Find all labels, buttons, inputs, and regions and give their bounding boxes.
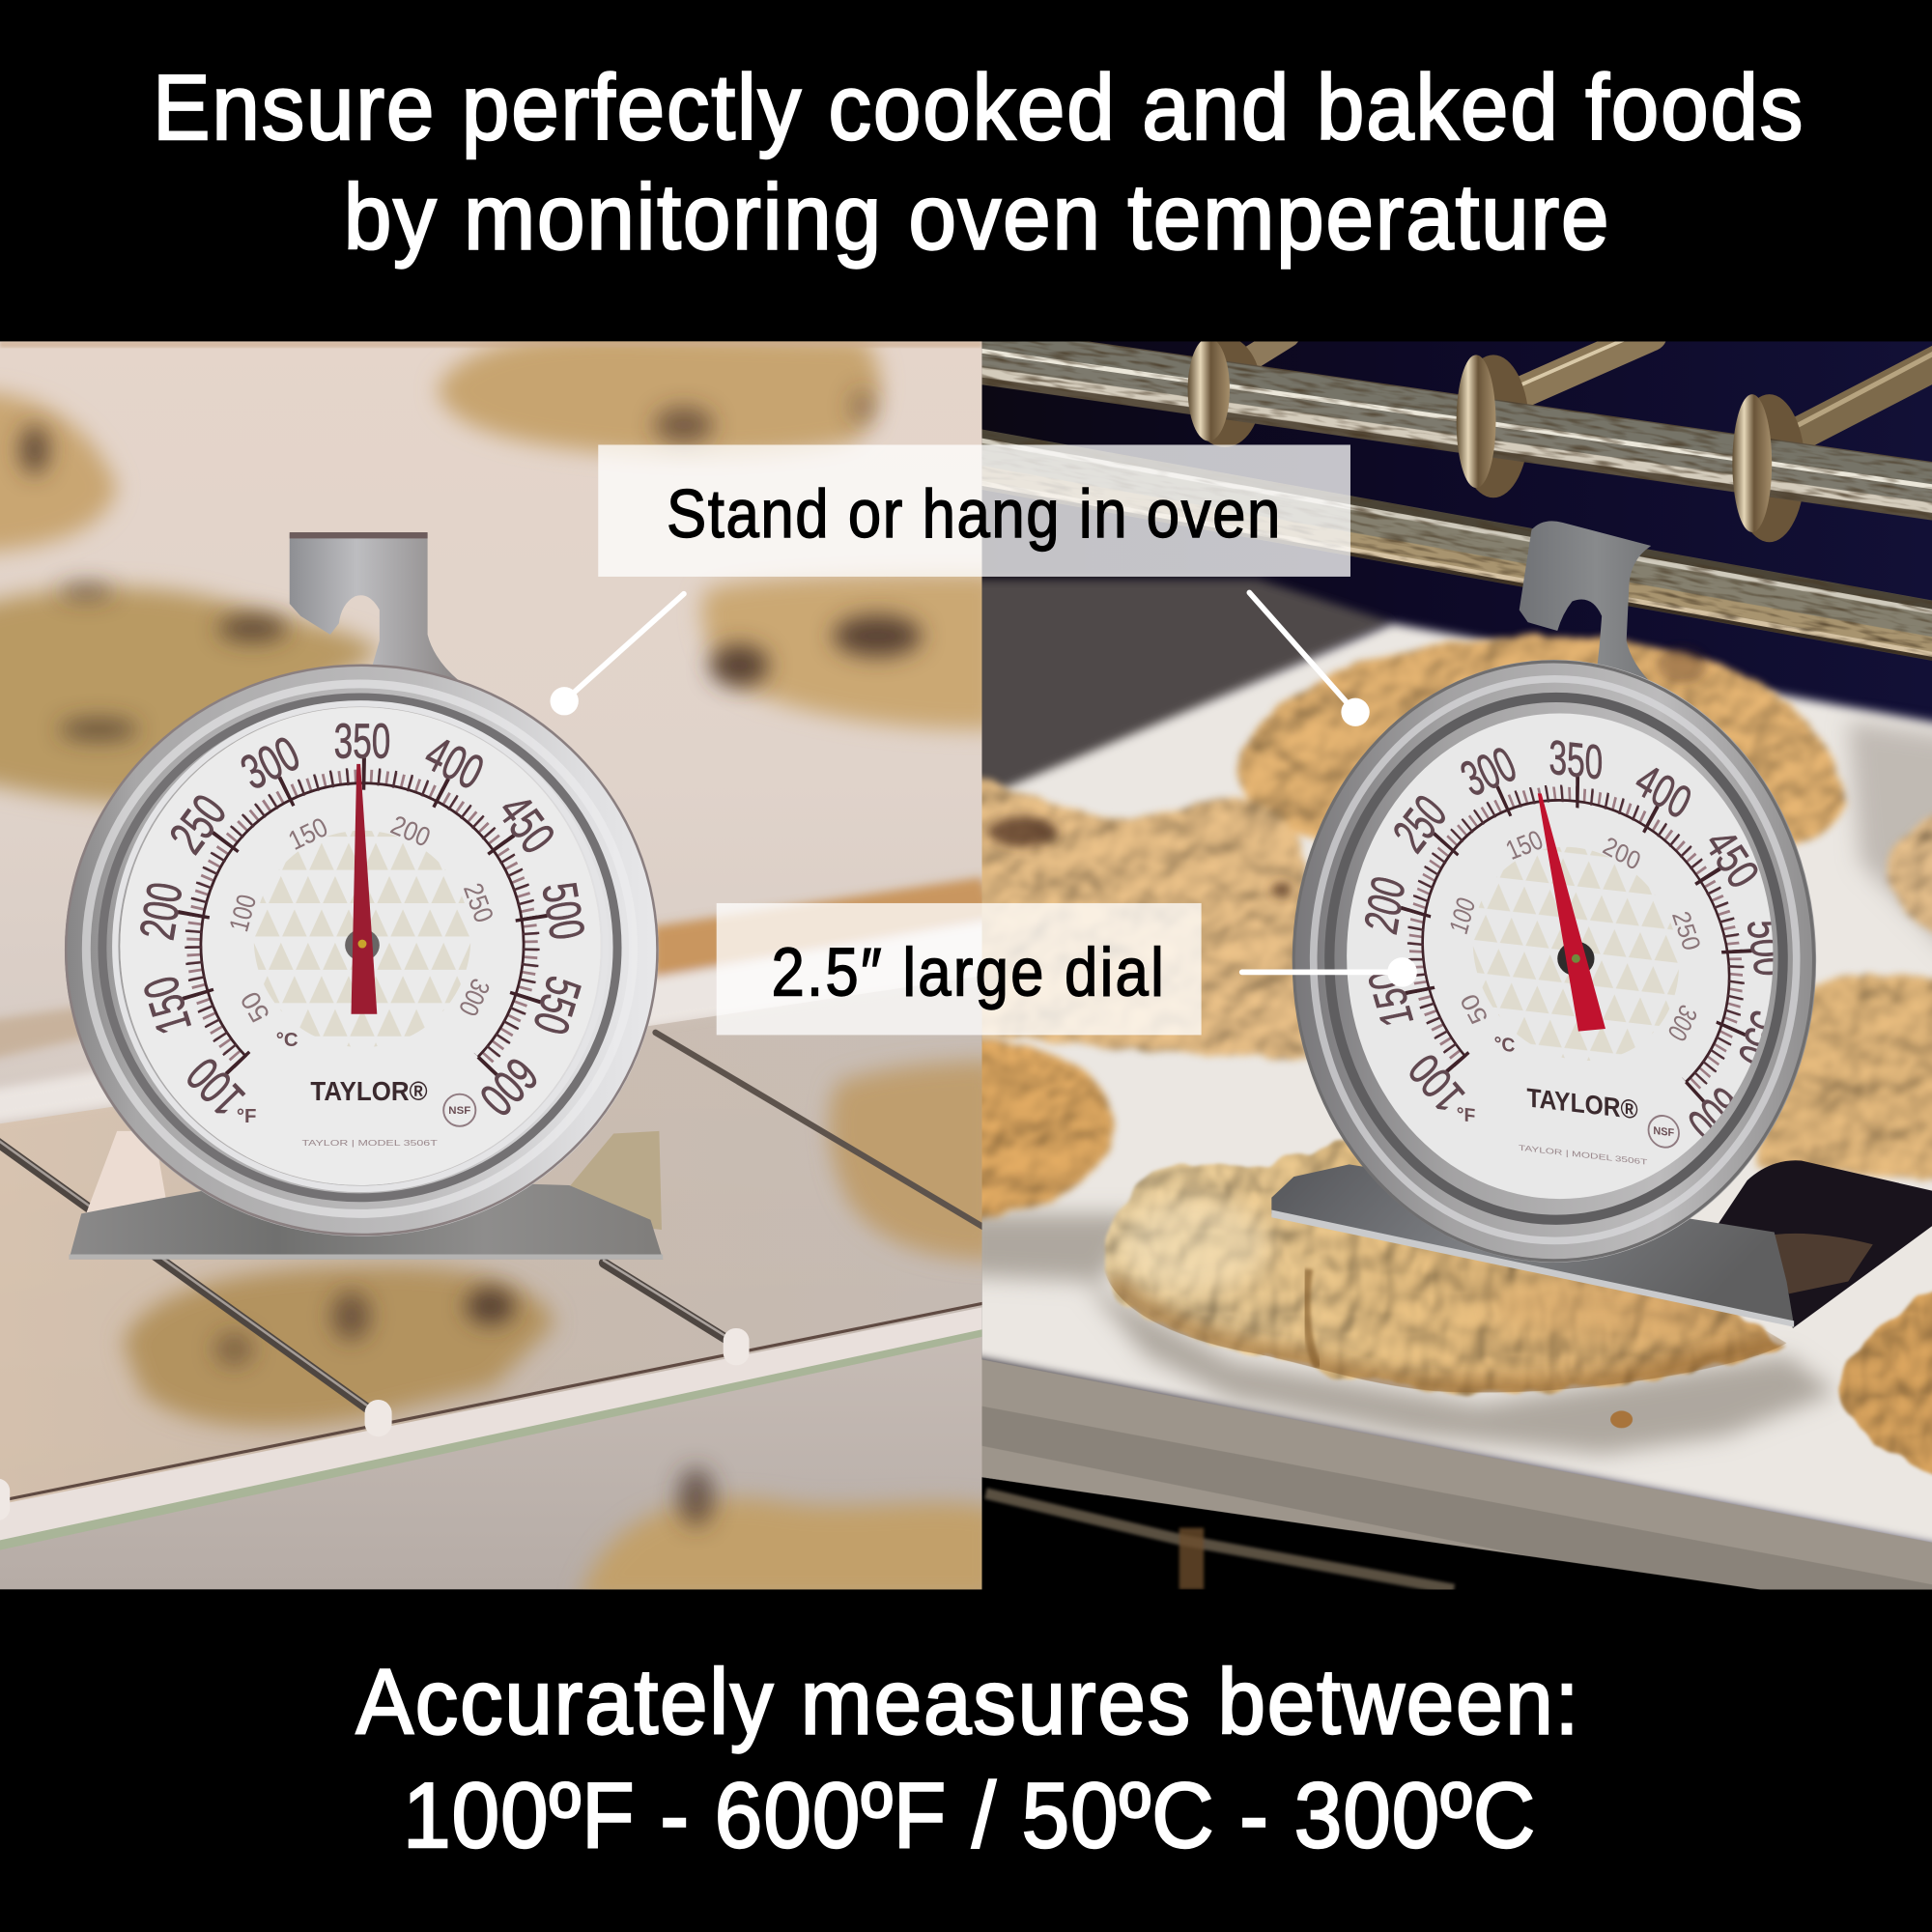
model line: TAYLOR | MODEL 3506T xyxy=(301,1138,438,1148)
medium ticks xyxy=(193,777,531,1063)
panel: right photo, oven rack with cookies and hanging thermometer xyxy=(956,324,1932,1596)
oven rack upper rod xyxy=(957,324,1932,526)
rack wires and back of loops xyxy=(1188,327,1932,542)
dark oven interior xyxy=(982,341,1932,1589)
Fahrenheit labels: 100 xyxy=(176,1047,255,1126)
temperature range text xyxy=(356,1650,1578,1867)
Fahrenheit labels: 350 xyxy=(334,713,390,768)
glass shelf reflection xyxy=(0,976,982,1506)
left thermometer rim xyxy=(65,665,659,1236)
blurred cookies on left wall xyxy=(0,332,998,1602)
blurred chocolate chips xyxy=(19,388,922,1526)
degree markers: °C xyxy=(1494,1033,1515,1057)
Fahrenheit labels: 600 xyxy=(469,1047,549,1126)
left wall background xyxy=(0,341,982,1589)
right thermometer hub pin xyxy=(1572,954,1580,963)
rail nubs xyxy=(0,1328,750,1520)
Fahrenheit labels: 300 xyxy=(233,725,308,800)
Celsius labels: 50 xyxy=(235,986,275,1027)
left dial scale and labels: °F xyxy=(237,1106,257,1127)
Fahrenheit labels: 100 xyxy=(1399,1044,1474,1122)
right dial scale and labels xyxy=(1355,708,1797,1183)
tray shaded face xyxy=(974,1405,1932,1596)
parchment shadows xyxy=(961,721,1932,1454)
Fahrenheit labels xyxy=(1355,708,1797,1162)
Celsius labels: 250 xyxy=(1666,908,1707,953)
rear oven rack rail xyxy=(0,877,998,1123)
Celsius labels: 100 xyxy=(223,892,262,935)
Celsius labels: 300 xyxy=(1662,1000,1703,1047)
medium ticks xyxy=(1415,777,1736,1093)
left thermometer xyxy=(65,532,663,1260)
triangle pattern xyxy=(254,831,470,1047)
main cookie in focus xyxy=(1103,1140,1786,1392)
arrow: callout to right hook xyxy=(1249,593,1370,726)
NSF mark: NSF xyxy=(448,1105,470,1117)
right thermometer hub ring xyxy=(1557,941,1595,976)
left thermometer hanging hook xyxy=(290,533,458,680)
right thermometer xyxy=(1271,521,1816,1327)
Fahrenheit labels: 250 xyxy=(1383,785,1457,863)
main arc xyxy=(1423,783,1729,1087)
Celsius labels: 250 xyxy=(458,879,499,926)
Fahrenheit labels: 550 xyxy=(523,970,592,1040)
blurred back cookies xyxy=(961,636,1932,1217)
front straps of rack loops xyxy=(1188,337,1772,532)
callout: stand or hang in oven xyxy=(598,444,1350,577)
NSF mark: NSF xyxy=(1653,1125,1674,1139)
right thermometer hanging hook xyxy=(1520,521,1673,702)
model line: TAYLOR | MODEL 3506T xyxy=(1519,1144,1647,1167)
Celsius labels: 200 xyxy=(1599,831,1645,876)
dark spots in back cookies xyxy=(988,648,1707,897)
Fahrenheit labels: 600 xyxy=(1678,1075,1752,1152)
arrow: callout to left hook xyxy=(551,594,684,715)
heading: Ensure perfectly cooked and baked foods xyxy=(153,55,1803,159)
minor ticks xyxy=(193,777,531,1063)
Celsius labels: 100 xyxy=(1443,893,1481,938)
panel: left photo, blurred cookies and thermometer standing on rack xyxy=(0,332,998,1602)
Fahrenheit labels: 450 xyxy=(488,784,565,863)
Fahrenheit labels: 400 xyxy=(1628,753,1699,830)
left thermometer back flaps of stand xyxy=(84,1131,166,1220)
left dial scale and labels xyxy=(129,713,595,1148)
left thermometer needle xyxy=(352,764,377,1014)
callout: stand or hang in oven: Stand or hang in oven xyxy=(667,476,1280,553)
Celsius labels: 300 xyxy=(453,975,496,1020)
right thermometer back flap reflection xyxy=(1713,1160,1932,1328)
NSF mark xyxy=(1649,1114,1679,1149)
metal baking tray xyxy=(974,1358,1932,1596)
cookie lower edge shading xyxy=(1109,1198,1786,1389)
temperature range text: 100ºF - 600ºF / 50ºC - 300ºC xyxy=(403,1763,1535,1867)
right dial scale and labels: °F xyxy=(1457,1103,1475,1127)
Celsius labels xyxy=(1443,811,1707,1056)
black space under tray xyxy=(974,1476,1768,1591)
Celsius labels: 150 xyxy=(1501,824,1548,866)
Fahrenheit labels: 300 xyxy=(1453,737,1524,807)
right thermometer base plate xyxy=(1271,1164,1794,1325)
Taylor brand: TAYLOR® xyxy=(1526,1082,1638,1124)
minor ticks xyxy=(1415,777,1736,1093)
parchment sheet xyxy=(961,623,1932,1552)
reflected cookies on shelf xyxy=(124,1062,998,1427)
Celsius labels: 150 xyxy=(284,811,332,856)
Fahrenheit labels: 200 xyxy=(1355,870,1415,939)
NSF mark xyxy=(443,1094,475,1126)
Celsius labels: 50 xyxy=(1454,989,1493,1029)
crumb on parchment xyxy=(1610,1410,1633,1428)
main arc xyxy=(201,783,524,1057)
arrow: callout to right dial xyxy=(1242,957,1417,987)
rack rods xyxy=(0,1033,985,1501)
degree markers: °C xyxy=(276,1030,298,1051)
Fahrenheit labels: 450 xyxy=(1694,821,1769,896)
Fahrenheit labels: 500 xyxy=(531,878,595,944)
Fahrenheit labels: 500 xyxy=(1737,919,1797,978)
heading: by monitoring oven temperature xyxy=(344,165,1608,269)
Fahrenheit labels: 400 xyxy=(416,725,492,800)
oven rack lower rod xyxy=(956,427,1932,667)
rods under tray xyxy=(985,1493,1454,1589)
Taylor brand: TAYLOR® xyxy=(310,1076,428,1106)
Fahrenheit labels: 150 xyxy=(1358,965,1424,1031)
Fahrenheit labels: 550 xyxy=(1728,1004,1794,1076)
callout: large dial xyxy=(717,903,1202,1035)
right thermometer rim xyxy=(1293,660,1816,1263)
Fahrenheit labels xyxy=(129,713,595,1126)
front rack rail xyxy=(0,1307,982,1545)
heading xyxy=(153,55,1803,269)
left thermometer hub ring xyxy=(345,929,380,961)
reflected chips on shelf xyxy=(214,1288,515,1367)
Fahrenheit labels: 350 xyxy=(1549,730,1603,790)
Celsius labels: 200 xyxy=(386,810,435,853)
left thermometer base plate xyxy=(69,1182,663,1260)
Fahrenheit labels: 250 xyxy=(159,784,237,863)
triangle pattern xyxy=(1473,836,1679,1071)
callout: large dial: 2.5″ large dial xyxy=(771,935,1164,1011)
right thermometer dial face xyxy=(1345,712,1776,1200)
major ticks xyxy=(1413,774,1739,1094)
Celsius labels xyxy=(223,810,499,1027)
major ticks xyxy=(191,774,533,1065)
temperature range text: Accurately measures between: xyxy=(356,1650,1578,1753)
Fahrenheit labels: 200 xyxy=(129,878,193,944)
warm strip at top of photo xyxy=(0,341,982,348)
Fahrenheit labels: 150 xyxy=(132,970,202,1040)
rack wires rising to the right xyxy=(1233,327,1932,443)
right thermometer needle xyxy=(1538,793,1605,1032)
soft grey tray back xyxy=(961,579,1392,801)
left thermometer hub pin xyxy=(358,940,366,949)
right lower cookie xyxy=(1838,1288,1932,1476)
left thermometer dial face xyxy=(120,707,601,1185)
